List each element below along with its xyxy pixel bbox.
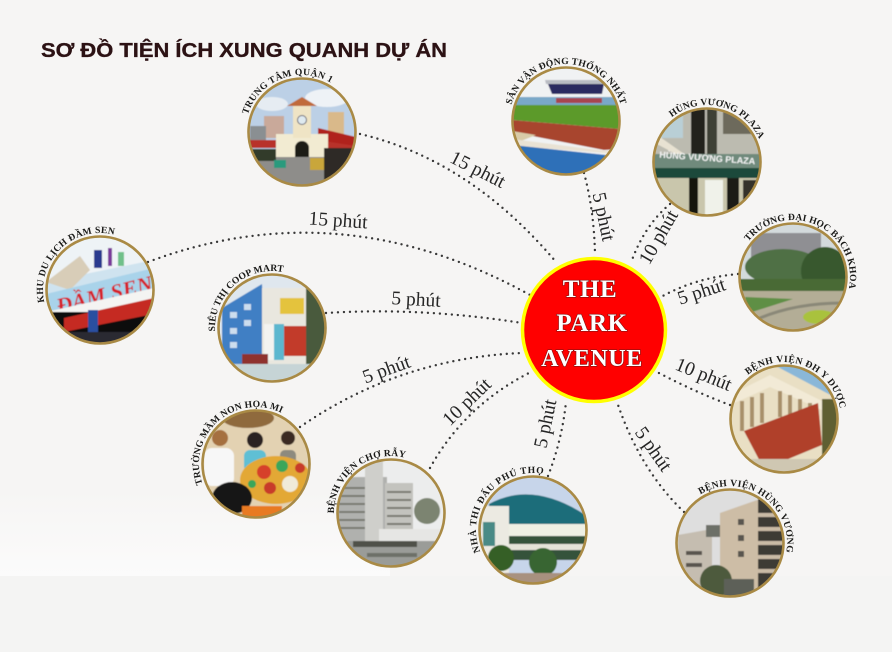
time label: 5 phút to Thống Nhất: 5 phút	[588, 190, 619, 244]
node: Nhà thi đấu Phú Thọ	[468, 466, 588, 585]
time label: 5 phút to Coop Mart: 5 phút	[391, 288, 442, 312]
location label: NHÀ THI ĐẤU PHÚ THỌ	[468, 466, 544, 554]
location label: BỆNH VIỆN CHỢ RẪY	[326, 447, 406, 514]
time label: 5 phút to Họa Mi: 5 phút	[360, 352, 414, 388]
time label: 10 phút to Y Dược: 10 phút	[672, 354, 735, 396]
location label: SIÊU THỊ COOP MART	[208, 264, 284, 331]
node: Hùng Vương Plaza: HÙNG VƯƠNG PLAZA	[659, 149, 756, 166]
time label: 5 phút to Phú Thọ: 5 phút	[531, 397, 562, 450]
time label: 10 phút to Chợ Rẫy: 10 phút	[439, 374, 496, 430]
node: Khu du lịch Đầm Sen	[36, 226, 155, 345]
location label: KHU DU LỊCH ĐẦM SEN	[36, 226, 116, 303]
node: Khu du lịch Đầm Sen: ĐẦM SEN	[53, 270, 156, 319]
location label: HÙNG VƯƠNG PLAZA	[668, 98, 764, 139]
location label: TRUNG TÂM QUẬN 1	[242, 68, 332, 114]
node: Sân vận động Thống Nhất	[506, 58, 627, 176]
location label: TRƯỜNG ĐẠI HỌC BÁCH KHOA	[744, 214, 856, 288]
node: Trung Tâm Quận 1	[242, 68, 357, 187]
location label: TRƯỜNG MẦM NON HỌA MI	[190, 400, 284, 486]
center badge: The Park Avenue: THE	[563, 276, 617, 303]
node: Bệnh viện Hùng Vương	[675, 480, 794, 598]
center badge: The Park Avenue: AVENUE	[541, 346, 643, 372]
node: Hùng Vương Plaza	[652, 98, 764, 217]
connector lines	[148, 134, 738, 512]
time label: 10 phút to Hùng Vương Plaza: 10 phút	[635, 206, 683, 268]
location label: SÂN VẬN ĐỘNG THỐNG NHẤT	[506, 58, 627, 104]
title: SƠ ĐỒ TIỆN ÍCH XUNG QUANH DỰ ÁN	[41, 38, 447, 62]
node: Trường Đại học Bách Khoa	[738, 214, 856, 332]
node: Siêu thị Coop Mart	[208, 264, 327, 383]
time label: 15 phút to Đầm Sen: 15 phút	[308, 208, 369, 234]
center badge: The Park Avenue	[522, 258, 666, 402]
location label: BỆNH VIỆN HÙNG VƯƠNG	[697, 480, 794, 552]
node: Bệnh viện Chợ Rẫy	[326, 447, 446, 568]
time label: 5 phút to Bách Khoa: 5 phút	[675, 274, 729, 310]
time label: 15 phút to Trung Tâm Quận 1: 15 phút	[446, 147, 509, 193]
time label: 5 phút to Hùng Vương hospital: 5 phút	[630, 423, 676, 476]
center badge: The Park Avenue: PARK	[556, 310, 628, 337]
location label: BỆNH VIỆN ĐH Y DƯỢC	[744, 354, 846, 408]
node: Bệnh viện ĐH Y Dược	[729, 354, 846, 474]
node: Trường mầm non Họa Mi	[190, 400, 311, 519]
